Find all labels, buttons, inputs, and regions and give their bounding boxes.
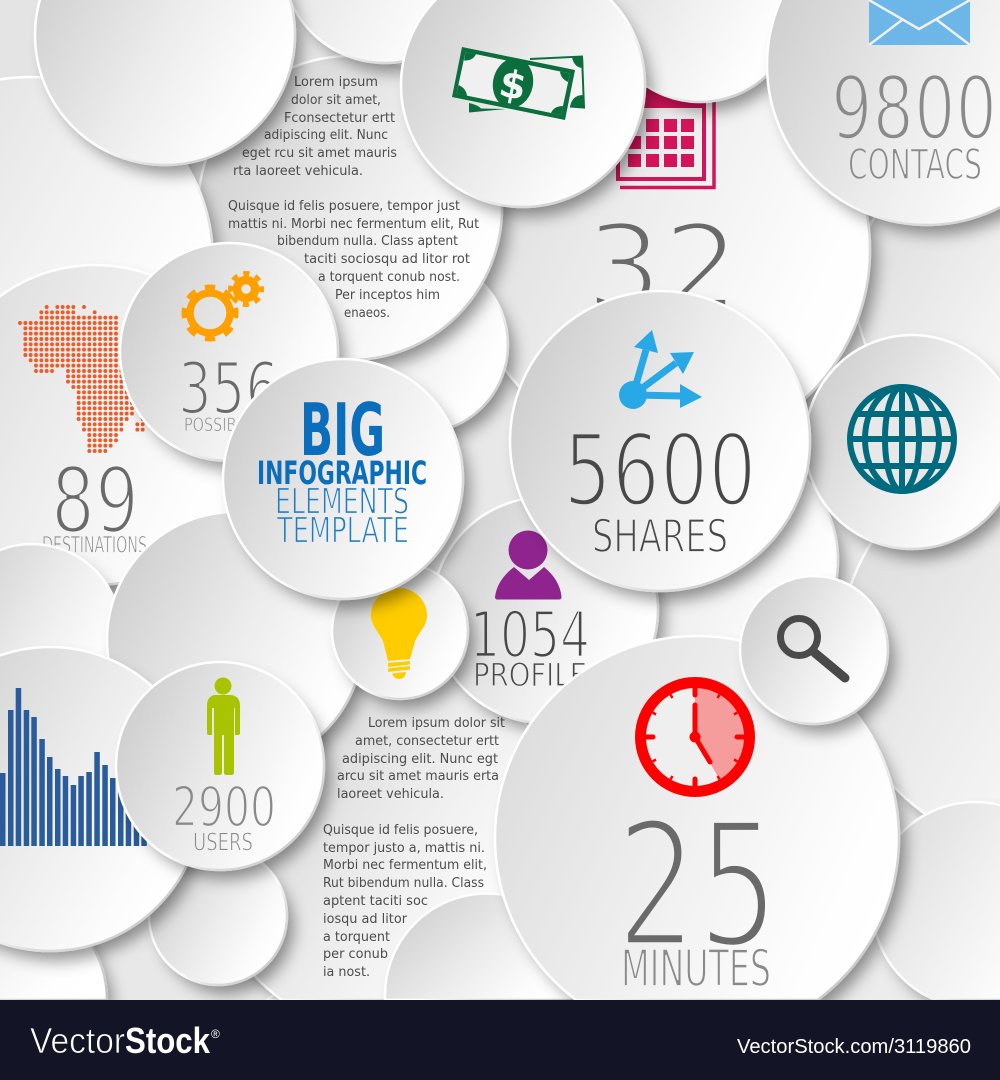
icon: magnifier [780, 618, 845, 678]
large upper left disc [0, 77, 213, 443]
text block: bottom lorem ipsum: Morbi nec fermentum elit, [323, 858, 487, 873]
number: 89: 89 [51, 449, 139, 554]
icon: envelope [869, 0, 970, 45]
panel: small left disc [0, 544, 121, 722]
icon: banknotes [452, 47, 584, 120]
bar chart [0, 688, 147, 846]
text block: top lorem ipsum: Lorem ipsum [294, 75, 378, 90]
icon: gears [185, 274, 262, 338]
footer bar [0, 1000, 1000, 1080]
text block: top lorem ipsum: enaeos. [344, 306, 390, 321]
text block: top lorem ipsum: taciti sociosqu ad litor rot [304, 252, 470, 267]
text block: bottom lorem ipsum: Lorem ipsum dolor sit [368, 716, 505, 731]
label: shares: SHARES [592, 510, 728, 563]
text block: top lorem ipsum: Fconsectetur ertt [284, 111, 395, 126]
text block: bottom lorem ipsum: a torquent [323, 930, 390, 945]
text block: bottom lorem ipsum: ia nost. [323, 965, 370, 980]
panel: title disc [223, 359, 463, 599]
disc behind shares [602, 442, 838, 678]
panel: bulb disc [332, 563, 468, 699]
footer logo: VectorStock [30, 1020, 223, 1061]
bottom center disc [385, 893, 589, 1000]
icon: calendar [616, 88, 714, 188]
icon: standing person [207, 678, 240, 775]
panel: middle disc [107, 512, 363, 768]
text block: top lorem ipsum: Per inceptos him [335, 288, 440, 303]
panel: bar chart disc [0, 647, 202, 951]
text block: bottom lorem ipsum: laoreet vehicula. [337, 787, 444, 802]
subtitle: template: TEMPLATE [276, 510, 409, 552]
panel: top text disc [198, 56, 502, 360]
number: 1054: 1054 [470, 599, 590, 673]
subtitle: elements: ELEMENTS [275, 482, 409, 522]
panel: profile disc [432, 497, 658, 723]
text block: bottom lorem ipsum: amet, consectetur ertt [355, 734, 499, 749]
footer image id: VectorStock.com/3119860 [737, 1036, 971, 1058]
background discs right and bottom [0, 145, 1000, 1000]
panel: calendar disc [466, 48, 870, 452]
panel: shares disc [510, 291, 810, 591]
text block: top lorem ipsum: adipiscing elit. Nunc [264, 128, 388, 143]
label: profile: PROFILE [473, 656, 587, 694]
text block: bottom lorem ipsum: iosqu ad litor [323, 912, 408, 927]
number: 356: 356 [178, 346, 279, 430]
footer logo: ® [211, 1027, 220, 1041]
text block: bottom lorem ipsum: Quisque id felis posuere, [323, 823, 478, 838]
panel: contacts disc [767, 0, 1000, 225]
text block: bottom lorem ipsum: arcu sit amet mauris erta [337, 769, 499, 784]
panel: africa disc [0, 265, 255, 585]
number: 5600: 5600 [564, 412, 756, 529]
text block: bottom lorem ipsum: aptent taciti soc [323, 894, 428, 909]
label: users: USERS [193, 828, 253, 856]
text block: top lorem ipsum: rta laoreet vehicula. [233, 164, 363, 179]
icon: banknotes: $ [496, 61, 530, 109]
text block: top lorem ipsum [228, 75, 479, 321]
number: 2900: 2900 [172, 775, 276, 839]
text block: bottom lorem ipsum: per conub [323, 947, 388, 962]
panel: minutes disc [495, 636, 899, 1000]
disc under top text [332, 257, 508, 433]
text block: bottom lorem ipsum: Rut bibendum nulla. Class [323, 876, 484, 891]
label: possibilities: POSSIBILITIES [184, 414, 284, 436]
text block: top lorem ipsum: bibendum nulla. Class aptent [277, 234, 458, 249]
small disc under users [149, 847, 287, 985]
title: infographic: INFOGRAPHIC [257, 454, 427, 492]
panel: search disc [740, 576, 888, 724]
label: destinations: DESTINATIONS [42, 534, 147, 558]
icon: clock [640, 682, 750, 792]
panel: gears disc [120, 243, 338, 461]
icon: profile person [495, 530, 562, 600]
text block: top lorem ipsum: dolor sit amet, [291, 93, 381, 108]
text block: top lorem ipsum: eget rcu sit amet mauris [242, 146, 397, 161]
disc behind top right [603, 0, 797, 102]
top left disc [35, 0, 295, 165]
number: 32: 32 [585, 200, 740, 335]
panel: users disc [116, 662, 324, 870]
panel: money disc [401, 0, 645, 207]
number: 25: 25 [616, 785, 779, 988]
text block: bottom lorem ipsum: adipiscing elit. Nunc egt [342, 752, 498, 767]
icon: share arrows [619, 330, 702, 409]
panel: bottom text disc [205, 665, 575, 1000]
text block: top lorem ipsum: a torquent conub nost. [318, 270, 460, 285]
panel: globe disc [805, 335, 1000, 549]
label: minutes: MINUTES [621, 940, 771, 999]
icon: globe [850, 387, 954, 491]
top middle disc [282, 0, 488, 63]
text block: top lorem ipsum: Quisque id felis posuere, tempor just [228, 199, 460, 214]
icon: dotted africa map [20, 307, 143, 451]
title: big: BIG [300, 388, 385, 472]
icon: light bulb [371, 588, 427, 679]
text block: bottom lorem ipsum [323, 716, 505, 980]
text block: bottom lorem ipsum: tempor justo a, mattis ni. [323, 841, 485, 856]
text block: top lorem ipsum: mattis ni. Morbi nec fermentum elit, Rut [228, 217, 479, 232]
